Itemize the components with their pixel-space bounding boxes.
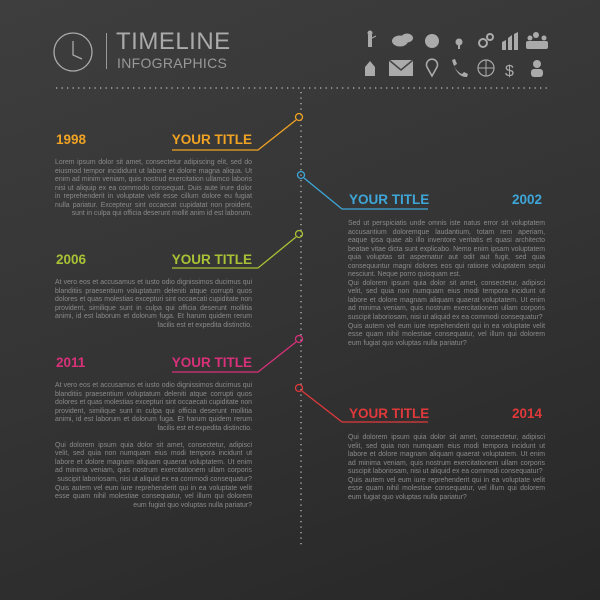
- entry 2002: Quis autem vel eum iure reprehenderit qui in ea voluptate velit esse quam nihil molestiae consequatur, vel illum qui dolorem eum fugiat quo voluptas nulla pariatur?: [348, 323, 545, 347]
- entry 2006: 2006: [56, 252, 86, 267]
- connector: 2011: [172, 336, 302, 372]
- entry 2011: YOUR TITLE: [172, 355, 252, 370]
- entry 2011: At vero eos et accusamus et iusto odio dignissimos ducimus qui blanditiis praesentium voluptatum deleniti atque corrupti quos dolores et quas molestias excepturi sint occaecati cupiditate non provident, similique sunt in culpa qui officia deserunt mollitia animi, id est laborum et dolorum fuga. Et harum quidem rerum facilis est et expedita distinctio.: [55, 382, 252, 432]
- entry 2006: [55, 252, 252, 329]
- entry 2002: [348, 192, 545, 347]
- connector: 2006: [172, 230, 302, 268]
- entry 1998: 1998: [56, 132, 86, 147]
- header: clock icon and title: INFOGRAPHICS: [117, 55, 227, 71]
- entry 1998: [55, 132, 252, 217]
- icon grid: $: [505, 63, 514, 80]
- entry 2014: YOUR TITLE: [349, 406, 429, 421]
- entry 2002: Sed ut perspiciatis unde omnis iste natus error sit voluptatem accusantium doloremque laudantium, totam rem aperiam, eaque ipsa quae ab illo inventore veritatis et quasi architecto beatae vitae dicta sunt explicabo. Nemo enim ipsam voluptatem quia voluptas sit aspernatur aut odit aut fugit, sed quia consequuntur magni dolores eos qui ratione voluptatem sequi nesciunt. Neque porro quisquam est.: [348, 220, 545, 278]
- entry 2011: 2011: [56, 355, 85, 370]
- entry 2014: Quis autem vel eum iure reprehenderit qui in ea voluptate velit esse quam nihil molestiae consequatur, vel illum qui dolorem eum fugiat quo voluptas nulla pariatur?: [348, 477, 545, 501]
- connector: 2014: [296, 384, 428, 422]
- header: clock icon and title: TIMELINE: [116, 28, 231, 55]
- connector: 1998: [172, 114, 302, 150]
- entry 2002: Qui dolorem ipsum quia dolor sit amet, consectetur, adipisci velit, sed quia non numquam eius modi tempora incidunt ut labore et dolore magnam aliquam quaerat voluptatem. Ut enim ad minima veniam, quis nostrum exercitationem ullam corporis suscipit laboriosam, nisi ut aliquid ex ea commodi consequatur?: [348, 280, 545, 321]
- entry 2011: [55, 355, 252, 509]
- entry 2006: At vero eos et accusamus et iusto odio dignissimos ducimus qui blanditiis praesentium voluptatum deleniti atque corrupti quos dolores et quas molestias excepturi sint occaecati cupiditate non provident, similique sunt in culpa qui officia deserunt mollitia animi, id est laborum et dolorum fuga. Et harum quidem rerum facilis est et expedita distinctio.: [55, 279, 252, 329]
- entry 2014: 2014: [512, 406, 542, 421]
- header: clock icon and title: [53, 28, 231, 72]
- entry 2011: Quis autem vel eum iure reprehenderit qui in ea voluptate velit esse quam nihil molestiae consequatur, vel illum qui dolorem eum fugiat quo voluptas nulla pariatur?: [55, 485, 252, 509]
- entry 2002: 2002: [512, 192, 542, 207]
- entry 2014: Qui dolorem ipsum quia dolor sit amet, consectetur, adipisci velit, sed quia non numquam eius modi tempora incidunt ut labore et dolore magnam aliquam quaerat voluptatem. Ut enim ad minima veniam, quis nostrum exercitationem ullam corporis suscipit laboriosam, nisi ut aliquid ex ea commodi consequatur?: [348, 434, 545, 475]
- connector: 2002: [298, 172, 428, 209]
- entry 1998: YOUR TITLE: [172, 132, 252, 147]
- entry 2011: Qui dolorem ipsum quia dolor sit amet, consectetur, adipisci velit, sed quia non numquam eius modi tempora incidunt ut labore et dolore magnam aliquam quaerat voluptatem. Ut enim ad minima veniam, quis nostrum exercitationem ullam corporis suscipit laboriosam, nisi ut aliquid ex ea commodi consequatur?: [55, 442, 252, 483]
- icon grid: [365, 30, 548, 80]
- entry 2002: YOUR TITLE: [349, 192, 429, 207]
- entry 2014: [348, 406, 545, 501]
- entry 2006: YOUR TITLE: [172, 252, 252, 267]
- entry 1998: Lorem ipsum dolor sit amet, consectetur adipiscing elit, sed do eiusmod tempor incididunt ut labore et dolore magna aliqua. Ut enim ad minim veniam, quis nostrud exercitation ullamco laboris nisi ut aliquip ex ea commodo consequat. Duis aute irure dolor in reprehenderit in voluptate velit esse cillum dolore eu fugiat nulla pariatur. Excepteur sint occaecat cupidatat non proident, sunt in culpa qui officia deserunt mollit anim id est laborum.: [55, 159, 252, 217]
